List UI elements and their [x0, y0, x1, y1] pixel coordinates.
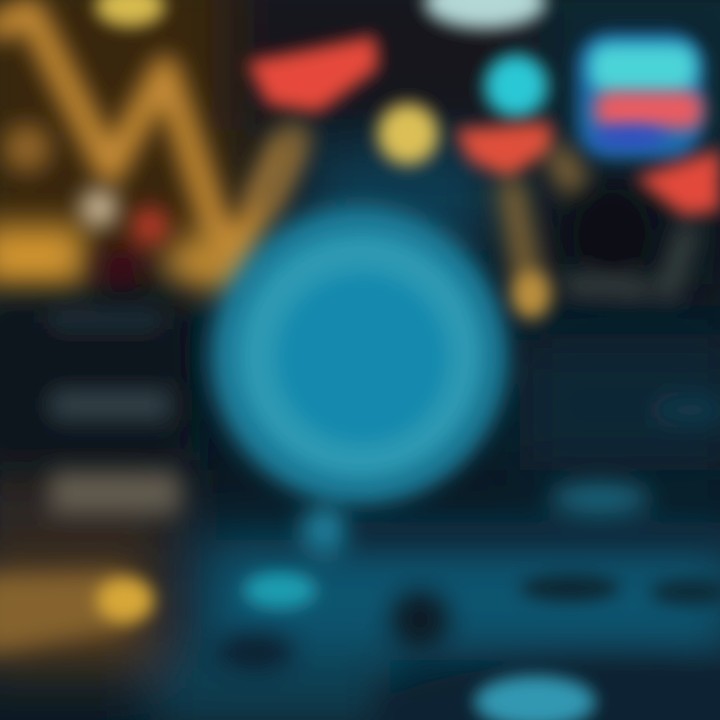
marker: top yellow	[96, 0, 164, 26]
red heart marker top	[248, 36, 378, 112]
bottom teal shapes	[215, 572, 720, 720]
right teal bars	[350, 396, 720, 544]
left dark panel	[0, 300, 190, 460]
big teal circle	[210, 207, 506, 554]
dark silhouette right	[572, 187, 652, 283]
gold pill bottom left	[0, 572, 153, 655]
orange connector lines	[262, 125, 578, 290]
marker: pale dot	[81, 190, 117, 226]
orange glow band, left	[0, 225, 247, 290]
grey connector right	[565, 225, 690, 300]
marker: red dot with dark base	[96, 208, 168, 292]
chart lines: orange zigzag top left	[0, 12, 290, 270]
top white ellipse	[425, 0, 545, 28]
red marker right	[635, 150, 720, 216]
app tile with flag	[578, 34, 702, 158]
cyan dot marker	[485, 55, 547, 117]
yellow circle marker	[378, 104, 438, 164]
orange blob under connector	[511, 271, 551, 319]
marker: orange ring left	[3, 124, 51, 172]
text bars left	[50, 310, 180, 514]
red heart marker middle	[455, 122, 552, 178]
